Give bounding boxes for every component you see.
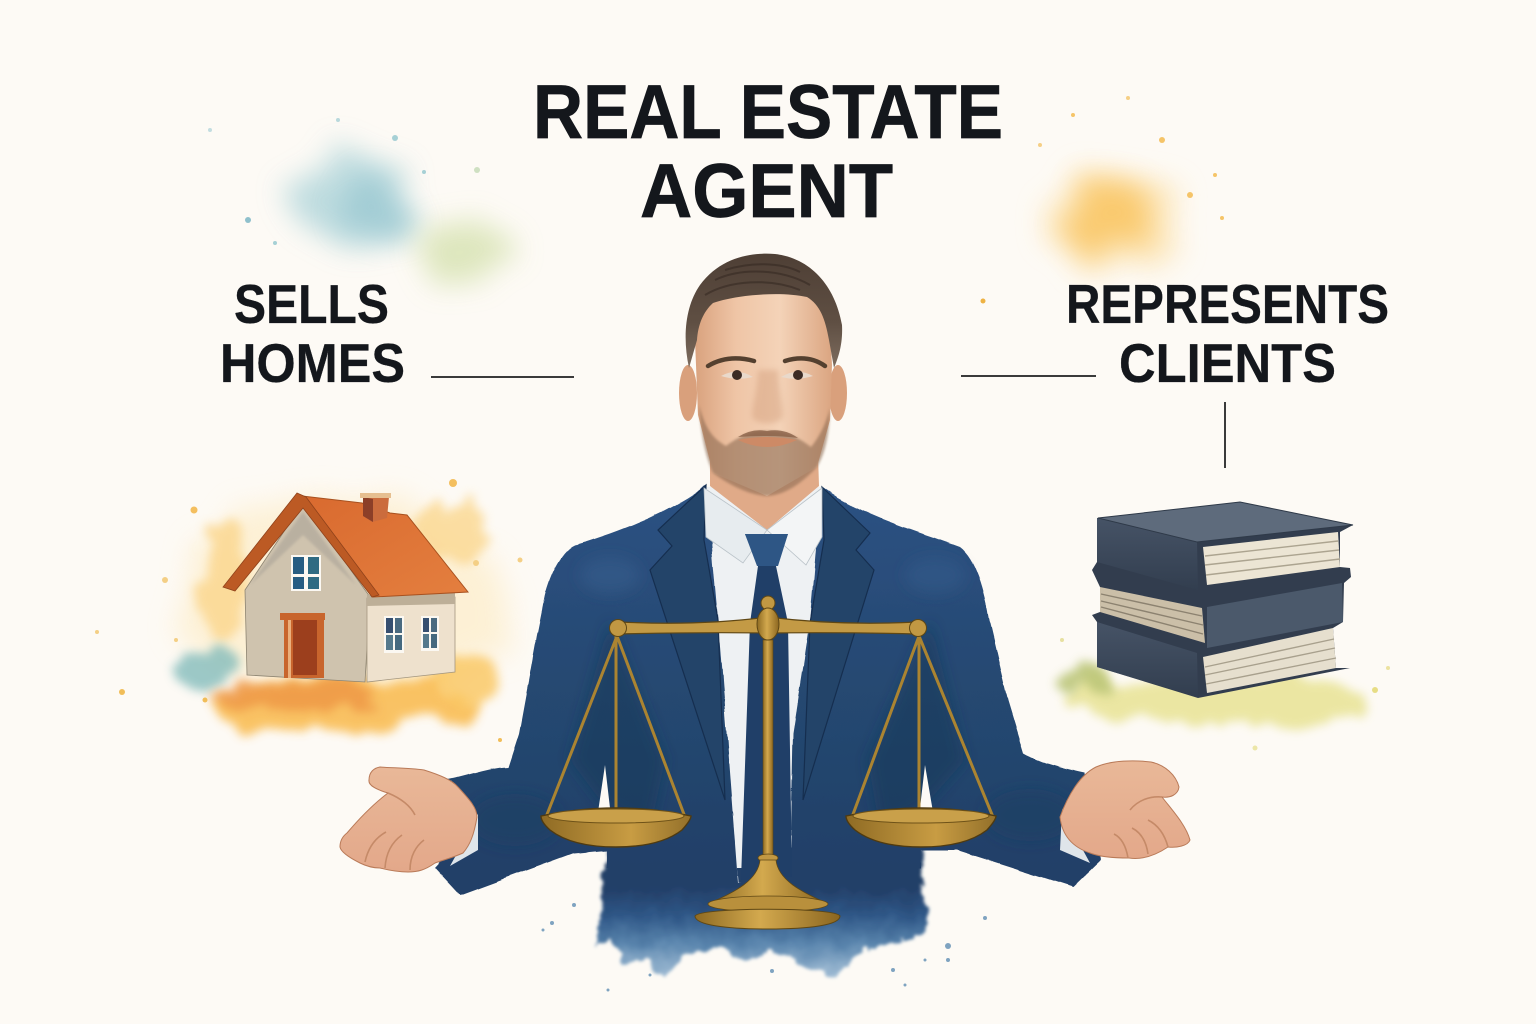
icon: stack of books <box>1092 502 1353 698</box>
label: represents clients: CLIENTS <box>1119 332 1336 394</box>
left shirt cuff <box>450 780 478 866</box>
middle book <box>1100 583 1343 648</box>
door <box>280 613 325 678</box>
watercolor wash under books <box>1058 638 1390 750</box>
eyebrows <box>708 358 825 366</box>
scale beam knobs <box>610 620 626 636</box>
title <box>533 70 1003 234</box>
armpit gaps <box>598 765 933 812</box>
label: sells homes: HOMES <box>220 332 405 394</box>
label: sells homes: SELLS <box>234 273 389 335</box>
tie <box>741 534 792 880</box>
connector line: clients to books <box>1224 402 1226 468</box>
title: REAL ESTATE <box>533 70 1003 155</box>
icon: house <box>223 493 468 682</box>
neck <box>710 455 819 530</box>
suit bottom wash <box>596 840 926 978</box>
shirt <box>703 487 823 883</box>
label: represents clients <box>1066 273 1389 394</box>
side windows <box>384 616 439 653</box>
watercolor splash: orange, top right <box>980 96 1224 304</box>
face <box>695 270 832 496</box>
scale base <box>695 854 840 929</box>
nose shadow <box>752 370 783 424</box>
watercolor splash behind house <box>95 479 550 742</box>
connector line: represents clients <box>961 375 1096 377</box>
house side wall <box>367 597 455 682</box>
hair <box>686 254 842 368</box>
scale pillar <box>763 640 773 860</box>
scale strings <box>546 636 993 818</box>
chimney <box>360 493 391 522</box>
scale beam <box>620 617 916 634</box>
left lapel <box>650 485 725 800</box>
scale finial <box>757 596 779 640</box>
ears <box>679 365 697 421</box>
bottom book <box>1097 622 1336 697</box>
house gable wall <box>245 503 370 682</box>
paint droplets under suit <box>542 903 987 992</box>
eyes <box>721 370 813 380</box>
left pan <box>541 808 691 847</box>
right pan <box>846 808 996 847</box>
attic window <box>291 555 321 591</box>
beard <box>699 405 830 496</box>
label: sells homes <box>220 273 405 394</box>
stack silhouette <box>1092 502 1353 698</box>
right lapel <box>803 487 874 800</box>
jacket <box>435 485 1101 895</box>
top book <box>1097 502 1353 590</box>
left hand <box>340 767 477 872</box>
right hand <box>1060 761 1190 858</box>
icon: balance scale <box>541 596 996 929</box>
connector line: sells homes <box>431 376 574 378</box>
jacket blotches <box>470 557 1075 846</box>
person <box>340 254 1190 978</box>
label: represents clients: REPRESENTS <box>1066 273 1389 335</box>
mouth <box>738 437 797 447</box>
roof <box>302 496 468 597</box>
title: AGENT <box>640 149 893 234</box>
watercolor splash: teal and green, top left <box>208 118 510 290</box>
right shirt cuff <box>1060 773 1090 863</box>
moustache <box>738 430 798 438</box>
shirt collar <box>704 488 767 563</box>
